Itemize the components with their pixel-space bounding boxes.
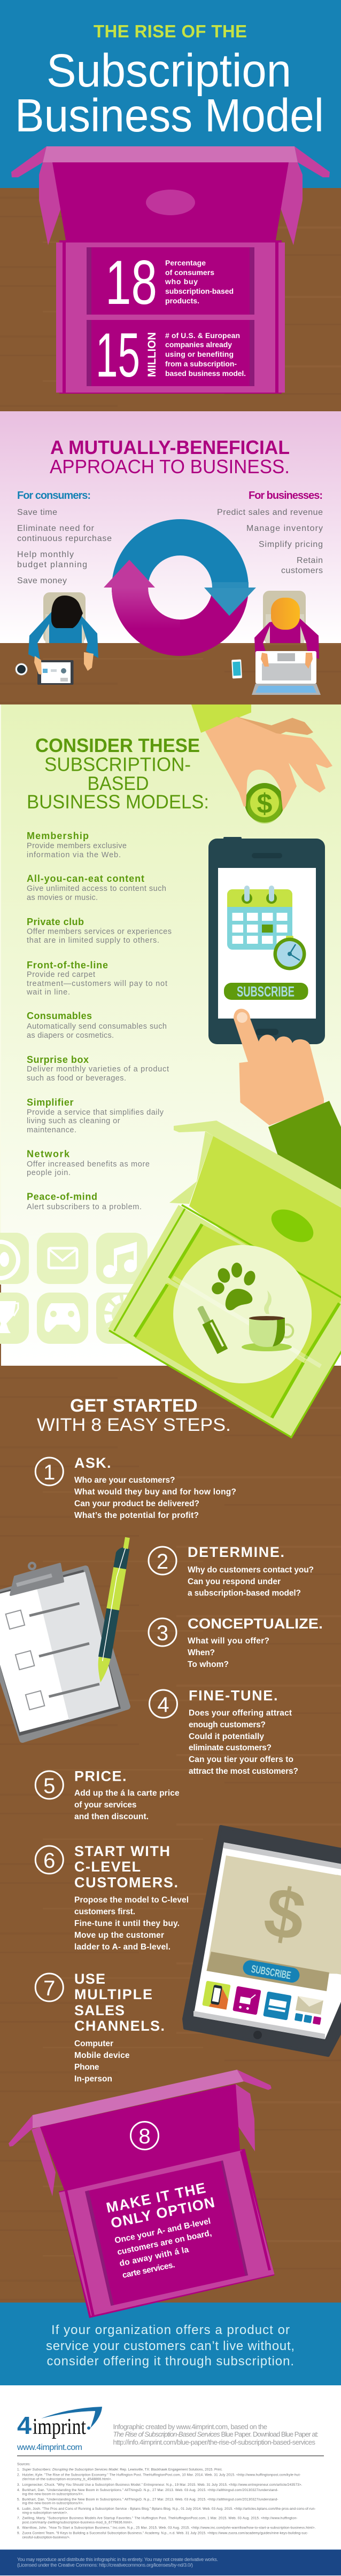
step 5: PRICE. <box>74 1768 126 1784</box>
button: subscribe: SUBSCRIBE <box>237 984 294 1000</box>
title <box>15 21 324 142</box>
item: private club <box>27 917 172 945</box>
icon: laptop <box>252 651 321 695</box>
text block: sources: Hutzler, Kyle. "The Rise of the Subscription Economy." The Huffington Post. TheHuffingtonPost.com, 10 Mar. 2014. Web. 31 July 2015. <http://www.huffingtonpost.com/kyle-hut- <box>22 2473 301 2477</box>
title: Business Model <box>15 90 324 142</box>
text block: sources: Ludin, Josh. "The Pros and Cons of Running a Subscription Service - Bplans Blog." Bplans Blog. N.p., 01 July 2014. Web. 03 Aug. 2015. <http://articles.bplans.com/the-pros-and-cons-of-run- <box>22 2507 315 2511</box>
icon: music app <box>96 1233 148 1284</box>
step 5: of your services <box>74 1800 137 1810</box>
heading: get started <box>37 1396 231 1435</box>
step 5: 5 <box>43 1774 55 1798</box>
icon: mail app <box>37 1233 88 1284</box>
text block: for consumers: continuous repurchase <box>17 534 112 543</box>
step 5: Add up the á la carte price <box>74 1789 180 1798</box>
panel: mutually beneficial background <box>0 411 341 643</box>
icon: smartphone on desk <box>231 660 242 678</box>
item: simplifier: maintenance. <box>27 1126 76 1134</box>
icon: paw print <box>210 1263 257 1310</box>
heading: mutually beneficial <box>50 436 290 477</box>
icon: tablet with shop page <box>184 1827 341 2055</box>
item: consumables: Consumables <box>27 1011 92 1021</box>
panel: stat 15 million: from a subscription- <box>165 359 237 368</box>
item: network: Network <box>27 1148 70 1159</box>
text block: for businesses <box>217 490 323 575</box>
icon: tablet <box>37 660 74 685</box>
step 1: ASK. <box>74 1455 111 1471</box>
text block: make it the only option <box>105 2180 216 2280</box>
step 1: Who are your customers? <box>74 1476 175 1485</box>
item: front-of-the-line: Provide red carpet <box>27 970 95 979</box>
step 4: Can you tier your offers to <box>189 1755 293 1764</box>
step 4: FINE-TUNE. <box>189 1688 278 1704</box>
step 6: Move up the customer <box>74 1931 164 1940</box>
step 4 <box>150 1688 298 1776</box>
panel: stat 15 million: # of U.S. & European <box>165 331 240 340</box>
text block: closing statement <box>46 2323 294 2369</box>
icon: calendar <box>227 886 292 950</box>
heading: mutually beneficial: A MUTUALLY-BENEFICIAL <box>50 436 290 458</box>
item: private club: that are in limited supply to others. <box>27 936 159 945</box>
item: front-of-the-line: treatment—customers will pay to not <box>27 980 167 988</box>
icon: coffee cup <box>15 663 27 675</box>
icon: envelope <box>296 1996 323 2015</box>
icon: magenta open box step 8 <box>9 2070 275 2318</box>
heading: get started: GET STARTED <box>70 1396 198 1416</box>
text block: sources: 6. <box>17 2507 20 2511</box>
step 7 <box>35 1971 165 2084</box>
item: front-of-the-line: wait in line. <box>26 988 70 997</box>
step 3 <box>149 1616 323 1669</box>
item: simplifier: Simplifier <box>27 1097 74 1108</box>
step 2: a subscription-based model? <box>188 1588 301 1598</box>
step 6 <box>35 1843 189 1952</box>
item: consumables <box>27 1011 167 1040</box>
step 5: and then discount. <box>74 1812 149 1821</box>
text block: sources <box>17 2463 316 2539</box>
icon: green open box <box>108 1121 341 1437</box>
panel: stat 15 million <box>87 320 254 390</box>
text block: sources: Burkhart, Dan. "Understanding the New Boom in Subscriptions." AllThingsD. N.p., 27 Mar. 2013. Web. 03 Aug. 2015. <http://allthingsd.com/20130327/understand- <box>22 2488 278 2492</box>
icon: open subscription box <box>11 146 330 394</box>
item: peace-of-mind: Alert subscribers to a problem. <box>27 1203 142 1211</box>
icon: dollar coin: $ <box>257 788 273 819</box>
item: membership: Provide members exclusive <box>27 842 127 850</box>
text block: sources: 3. <box>17 2483 20 2487</box>
text block: sources: ing-the-new-boom-in-subscriptions/#>. <box>22 2493 84 2496</box>
step 7: 7 <box>43 1977 55 2000</box>
text block: for businesses: Predict sales and revenue <box>217 508 323 517</box>
logo: 4imprint: imprint <box>33 2415 86 2439</box>
logo: 4imprint <box>17 2407 102 2452</box>
item: surprise box: Surprise box <box>27 1054 89 1065</box>
text block: for businesses: customers <box>281 566 323 575</box>
title: THE RISE OF THE <box>94 21 247 41</box>
item: all-you-can-eat content: All-you-can-eat content <box>27 873 144 884</box>
step 6: CUSTOMERS. <box>74 1875 178 1891</box>
text block: for consumers: Help monthly <box>17 550 74 559</box>
icon: globe app <box>0 1233 29 1284</box>
text block: attribution: The Rise of Subscription-Based Services Blue Paper. Download Blue Paper at: <box>113 2430 319 2438</box>
panel: stat 18 percent: of consumers <box>165 268 214 277</box>
text block: sources: ing-the-new-boom-in-subscriptions/#>. <box>22 2502 84 2505</box>
step 1 <box>35 1455 236 1520</box>
icon: trophy app <box>0 1293 29 1344</box>
text block: make it the only option: customers are on board, <box>117 2228 213 2257</box>
text block: sources: 1. <box>17 2468 20 2472</box>
text block: sources: Zuora Content Team. "9 Keys to Building a Successful Subscription Business." Academy. N.p., n.d. Web. 31 July 2015. <https://www.zuora.com/academy/guides/nine-keys-building-suc- <box>22 2532 308 2535</box>
text block: sources: Zwilling, Marty. "Subscription Business Models Are Startup Favorites." The Huffington Post. TheHuffingtonPost.com, 1 Mar. 2015. Web. 03 Aug. 2015. <http://www.huffington- <box>22 2517 298 2520</box>
button: subscribe <box>224 983 308 1000</box>
step 1: What would they buy and for how long? <box>74 1487 236 1497</box>
text block: make it the only option: carte services. <box>121 2260 176 2280</box>
step 2 <box>149 1544 314 1598</box>
heading: consider these: BUSINESS MODELS: <box>27 790 209 813</box>
text block: for consumers: For consumers: <box>17 490 91 502</box>
step 4: enough customers? <box>189 1720 266 1729</box>
step 3: What will you offer? <box>188 1637 269 1646</box>
text block: sources: post.com/marty-zwilling/subscription-business-mod_b_6779836.html>. <box>22 2520 133 2524</box>
step 2: 2 <box>157 1550 168 1573</box>
icon: stopwatch <box>274 936 306 970</box>
step 6: START WITH <box>74 1843 170 1859</box>
icon: smartphone with subscribe screen <box>208 837 325 1044</box>
item: peace-of-mind: Peace-of-mind <box>27 1191 97 1202</box>
heading: consider these: BASED <box>88 772 149 794</box>
title: Subscription <box>46 45 291 97</box>
step 7: Mobile device <box>74 2051 130 2060</box>
panel: business models background <box>0 704 341 1366</box>
step 2: DETERMINE. <box>188 1544 284 1560</box>
step 6: C-LEVEL <box>74 1859 141 1875</box>
sleeve <box>268 1101 341 1193</box>
icon: app grid <box>0 1233 148 1344</box>
item: surprise box: Deliver monthly varieties of a product <box>27 1065 169 1074</box>
step 1: What’s the potential for profit? <box>74 1511 199 1520</box>
panel: stat 18 percent: who buy <box>165 277 198 286</box>
item: membership: Membership <box>27 831 89 841</box>
icon: tablet with shop page: $ <box>259 1872 311 1956</box>
icon: game controller app <box>37 1293 88 1344</box>
panel: header sky <box>0 0 341 188</box>
icon: credit card tile <box>263 1991 292 2021</box>
text block: sources: Sources: <box>17 2463 30 2467</box>
step 7: In-person <box>74 2074 112 2084</box>
step 7: Phone <box>74 2063 99 2072</box>
wood table <box>0 643 341 704</box>
step 3: CONCEPTUALIZE. <box>188 1616 323 1632</box>
item: surprise box <box>27 1054 169 1083</box>
item: simplifier: Provide a service that simplifies daily <box>27 1108 164 1117</box>
text block: sources: Longenecker, Chuck. "Why You Should Use a Subscription Business Model." Entrepreneur. N.p., 19 Mar. 2015. Web. 31 July 2015. <http://www.entrepreneur.com/article/243573>. <box>22 2483 303 2487</box>
text block: for businesses: Simplify pricing <box>259 540 323 549</box>
logo: 4imprint: 4 <box>17 2411 32 2439</box>
text block: for consumers <box>17 490 112 585</box>
text block: for consumers: Save money <box>17 576 67 585</box>
step 4: attract the most customers? <box>189 1767 298 1776</box>
text block: sources: Super Subscribers: Disrupting the Subscription Services Model. Rep. Lewisville, TX: Blackhawk Engagement Solutions, 2015. Print. <box>22 2468 222 2472</box>
text block: attribution: http://info.4imprint.com/blue-paper/the-rise-of-subscription-based-services <box>113 2438 315 2446</box>
text block: for consumers: Eliminate need for <box>17 524 95 533</box>
text block: sources: ning-a-subscription-service/>. <box>22 2511 68 2515</box>
item: network: Offer increased benefits as more <box>27 1160 150 1169</box>
panel: get started wood background <box>0 1366 341 2303</box>
step 6: ladder to A- and B-level. <box>74 1943 170 1952</box>
item: membership: information via the Web. <box>27 851 121 859</box>
item: front-of-the-line: Front-of-the-line <box>27 960 108 970</box>
item: private club: Offer members services or experiences <box>27 927 172 936</box>
item: private club: Private club <box>27 917 84 927</box>
icon: pointing hand <box>234 1009 341 1193</box>
icon: phone tile <box>202 1980 231 2010</box>
text block: closing statement: service your customers can’t live without, <box>46 2339 294 2353</box>
panel: stat 15 million: 15 <box>96 320 140 390</box>
panel: stat 15 million: MILLION <box>146 332 158 377</box>
item: simplifier: living such as cleaning or <box>27 1117 120 1125</box>
item: all-you-can-eat content: Give unlimited access to content such <box>27 884 166 893</box>
text block: business model list <box>26 831 172 1211</box>
step 7: CHANNELS. <box>74 2018 165 2034</box>
item: network <box>27 1148 150 1177</box>
step 3: When? <box>188 1648 215 1657</box>
heading: consider these <box>27 734 209 813</box>
text block: sources: 2. <box>17 2473 20 2477</box>
step 4: Could it potentially <box>189 1732 264 1741</box>
step 1: 1 <box>43 1461 55 1484</box>
text block: sources: zler/rise-of-the-subscription-economy_b_4548866.html>. <box>22 2477 112 2481</box>
text block: sources: 5. <box>17 2498 20 2502</box>
step 7: SALES <box>74 2002 125 2018</box>
icon: clipboard checklist <box>0 1562 127 1740</box>
panel: stat 18 percent: products. <box>165 296 199 305</box>
step 3: 3 <box>157 1622 168 1645</box>
heading: get started: WITH 8 EASY STEPS. <box>37 1415 231 1435</box>
step 6: Propose the model to C-level <box>74 1896 189 1905</box>
step 4: eliminate customers? <box>189 1743 272 1752</box>
text block: sources: cessful-subscription-business/>. <box>22 2535 71 2539</box>
item: peace-of-mind <box>27 1191 142 1211</box>
panel: stat 18 percent: Percentage <box>165 259 206 267</box>
text block: for businesses: Retain <box>297 556 323 565</box>
illustration: consumer at desk <box>15 592 98 685</box>
panel: stat 18 percent: 18 <box>105 247 157 317</box>
text block: for consumers: budget planning <box>17 560 87 569</box>
text block: make it the only option: do away with á la <box>119 2245 190 2268</box>
step 2: Can you respond under <box>188 1577 281 1586</box>
panel: license band <box>0 2549 341 2575</box>
text block: sources: 7. <box>17 2517 20 2520</box>
icon: lipstick <box>195 1304 228 1354</box>
text block: sources: 4. <box>17 2488 20 2492</box>
text block: sources: 9. <box>17 2532 20 2535</box>
text block: sources: Warrillow, John. "How To Start a Subscription Business." Inc.com. N.p., 25 Mar. 2015. Web. 03 Aug. 2015. <http://www.inc.com/john-warrillow/how-to-start-a-subscription-business.html>. <box>22 2526 316 2530</box>
text block: closing statement: If your organization offers a product or <box>51 2323 290 2337</box>
icon: dollar coin <box>245 783 284 824</box>
illustration: business owner at desk <box>252 591 321 695</box>
text block: sources: Burkhart, Dan. "Understanding the New Boom in Subscriptions." AllThingsD. N.p., 27 Mar. 2013. Web. 03 Aug. 2015. <http://allthingsd.com/20130327/understand- <box>22 2498 278 2502</box>
step 6: customers first. <box>74 1907 135 1916</box>
step 6: Fine-tune it until they buy. <box>74 1919 180 1928</box>
heading: consider these: CONSIDER THESE <box>35 734 200 756</box>
step 3: To whom? <box>188 1660 229 1669</box>
icon: cart tile <box>232 1986 261 2015</box>
text block: attribution <box>113 2423 319 2446</box>
step 4: Does your offering attract <box>189 1709 292 1718</box>
step 5 <box>35 1768 180 1821</box>
icon: gear app <box>96 1293 148 1344</box>
heading: consider these: SUBSCRIPTION- <box>44 753 191 776</box>
icon: magenta open box step 8: 8 <box>138 2125 151 2148</box>
step 7: USE <box>74 1971 105 1987</box>
text block: closing statement: consider offering it through subscription. <box>47 2354 294 2369</box>
item: all-you-can-eat content <box>27 873 166 902</box>
text block: for businesses: For businesses: <box>249 490 323 502</box>
item: front-of-the-line <box>26 960 167 997</box>
item: consumables: Automatically send consumables such <box>27 1022 167 1031</box>
panel: stat 15 million: using or benefiting <box>165 350 234 358</box>
text block: sources: 8. <box>17 2526 20 2530</box>
step 7: MULTIPLE <box>74 1986 152 2002</box>
step 7: Computer <box>74 2039 113 2048</box>
item: simplifier <box>27 1097 164 1134</box>
button: subscribe: SUBSCRIBE <box>250 1963 292 1982</box>
logo: 4imprint: www.4imprint.com <box>17 2443 82 2452</box>
text block: for businesses: Manage inventory <box>246 524 323 533</box>
text block: for consumers: Save time <box>17 508 57 517</box>
step 4: 4 <box>157 1693 169 1717</box>
panel: closing blue band <box>0 2303 341 2385</box>
text block: make it the only option: Once your A- and B-level <box>114 2217 212 2245</box>
step 6: 6 <box>43 1849 55 1873</box>
button: subscribe <box>242 1959 301 1984</box>
icon: coffee cup <box>242 1290 293 1351</box>
text block: attribution: Infographic created by www.4imprint.com, based on the <box>113 2423 267 2431</box>
item: surprise box: such as food or beverages. <box>27 1074 126 1083</box>
panel: stat 18 percent: subscription-based <box>165 287 234 295</box>
chart: circular arrows <box>104 519 256 656</box>
item: all-you-can-eat content: as movies or music. <box>27 894 98 902</box>
step 1: Can your product be delivered? <box>74 1499 199 1508</box>
panel: stat 18 percent <box>87 247 254 317</box>
item: network: people join. <box>27 1169 71 1177</box>
icon: pen <box>94 1536 131 1684</box>
step 2: Why do customers contact you? <box>188 1565 314 1575</box>
panel: stat 15 million: companies already <box>165 340 232 349</box>
heading: mutually beneficial: APPROACH TO BUSINESS. <box>50 456 290 477</box>
panel: footer white <box>0 2385 341 2550</box>
text block: make it the only option: MAKE IT THE <box>105 2180 207 2216</box>
icons: small squares <box>294 2013 321 2025</box>
text block: make it the only option: ONLY OPTION <box>110 2194 216 2232</box>
item: consumables: as diapers or cosmetics. <box>27 1031 114 1040</box>
panel: stat 15 million: based business model. <box>165 369 246 378</box>
icon: hand holding coin <box>191 704 332 824</box>
panel: header wood table <box>0 188 341 411</box>
panel: license band: (Licensed under the Creative Commons: http://creativecommons.org/licenses/by-nd/3.0/) <box>17 2563 193 2568</box>
item: membership <box>27 831 127 859</box>
panel: license band: You may reproduce and distribute this infographic in its entirety. You may not create derivative works. <box>17 2557 218 2562</box>
